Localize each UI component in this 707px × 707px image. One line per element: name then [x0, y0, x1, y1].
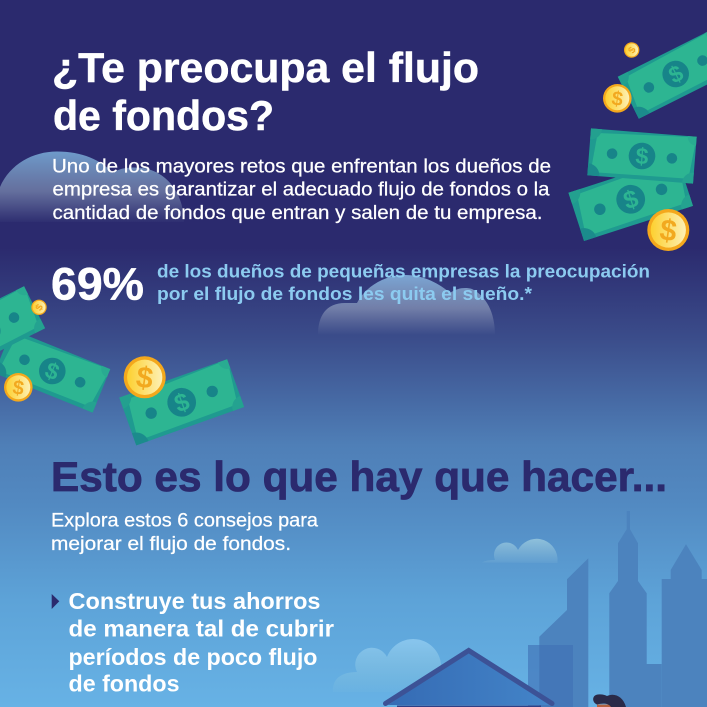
cloud: top left	[0, 152, 184, 222]
intro paragraph: Uno de los mayores retos que enfrentan los dueños de	[52, 157, 551, 178]
statistic description: de los dueños de pequeñas empresas la preocupación	[157, 261, 650, 281]
bill: centre	[103, 344, 260, 462]
intro paragraph: cantidad de fondos que entran y salen de tu empresa.	[52, 203, 542, 224]
subheading: mejorar el flujo de fondos.	[51, 534, 291, 555]
coin: tiny left: $	[34, 302, 46, 313]
tip 1	[52, 588, 334, 697]
bill: middle: $	[635, 143, 650, 169]
coin: medium: $	[610, 88, 624, 111]
coin: large: $	[658, 213, 679, 249]
title: ¿Te preocupa el flujo	[52, 44, 479, 91]
heading: what to do: Esto es lo que hay que hacer...	[51, 453, 667, 500]
bill: top: $	[664, 59, 687, 88]
bill: left lower: $	[41, 357, 63, 386]
building: left tower	[539, 558, 588, 707]
coin: medium left: $	[11, 377, 25, 400]
intro paragraph	[52, 157, 551, 224]
coin: large centre	[124, 356, 166, 398]
house roof	[386, 650, 552, 707]
bill: middle	[574, 117, 707, 196]
coin: tiny left	[31, 300, 47, 315]
person head	[593, 694, 626, 707]
bill: back lower	[552, 143, 707, 257]
bill: left lower	[0, 315, 125, 428]
icon: bullet arrow	[52, 594, 59, 609]
intro paragraph: empresa es garantizar el adecuado flujo de fondos o la	[52, 180, 550, 201]
title	[52, 44, 479, 139]
coin: large centre: $	[134, 361, 155, 396]
coin: tiny	[624, 42, 639, 58]
tip text: de fondos	[68, 671, 180, 697]
tip text: Construye tus ahorros	[68, 588, 320, 614]
statistic description: por el flujo de fondos les quita el sueño.*	[157, 284, 532, 304]
cloud: lower	[333, 639, 441, 692]
cloud: small right	[482, 539, 558, 563]
tip text: de manera tal de cubrir	[68, 616, 334, 642]
cloud: middle	[318, 275, 495, 335]
coin: tiny: $	[626, 45, 639, 56]
building: spire tower	[609, 511, 662, 707]
bill: left top	[0, 271, 60, 392]
tip text	[68, 588, 334, 697]
money group: top right	[552, 14, 707, 257]
skyline buildings	[528, 511, 707, 707]
building: right tower	[662, 544, 707, 707]
title: de fondos?	[53, 92, 274, 139]
bill: top	[602, 14, 707, 135]
statistic description	[157, 261, 650, 304]
bill: centre: $	[171, 388, 193, 418]
subheading: Explora estos 6 consejos para	[51, 511, 318, 532]
bill: back lower: $	[620, 185, 642, 215]
money group: left	[0, 271, 260, 462]
coin: medium	[603, 84, 632, 113]
tip text: períodos de poco flujo	[68, 644, 318, 670]
subheading	[51, 511, 318, 555]
coin: medium left	[4, 373, 33, 402]
coin: large	[647, 209, 689, 251]
building: front block	[528, 645, 573, 707]
statistic: 69%: 69%	[51, 258, 144, 310]
